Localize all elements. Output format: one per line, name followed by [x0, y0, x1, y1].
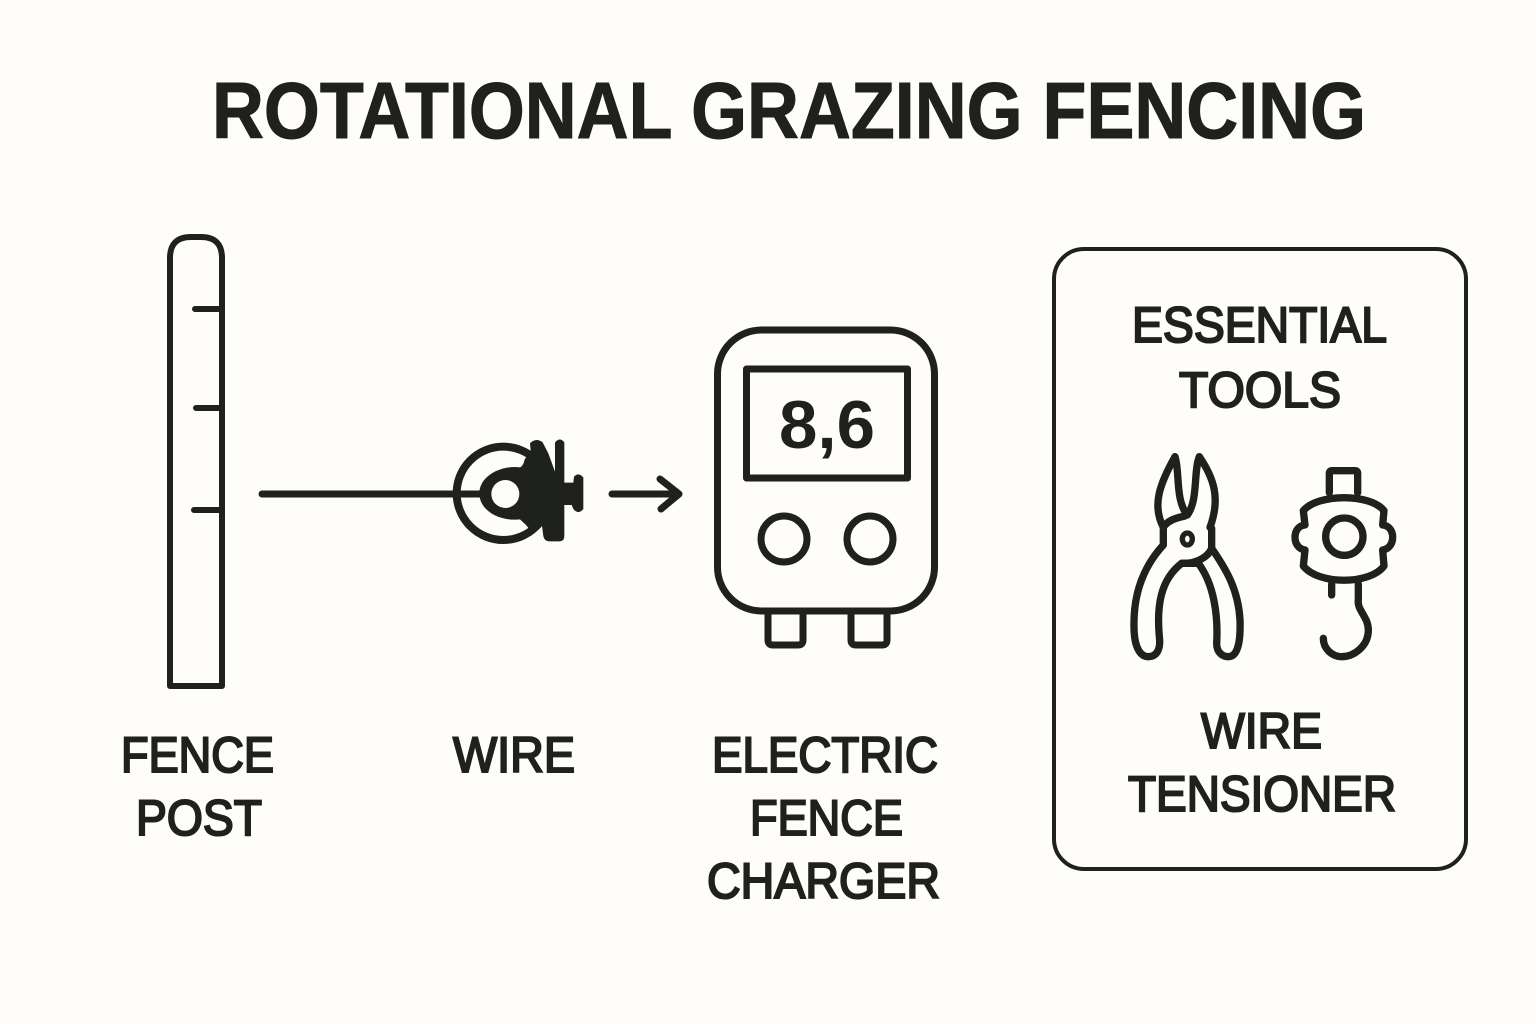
label: wire: WIRE	[453, 727, 575, 783]
arrow	[612, 479, 679, 509]
panel heading: TOOLS	[1179, 362, 1341, 418]
icon: fence post	[170, 237, 222, 686]
label: electric fence charger: CHARGER	[707, 853, 940, 909]
title: ROTATIONAL GRAZING FENCING	[212, 66, 1366, 155]
display reading: 8,6	[779, 387, 875, 463]
icon: pliers	[1134, 457, 1240, 657]
panel heading	[1132, 297, 1387, 418]
charger terminals	[768, 613, 887, 645]
panel frame	[1054, 249, 1466, 869]
label: wire tensioner	[1128, 703, 1396, 822]
charger display	[746, 369, 908, 478]
charger body	[718, 330, 934, 611]
icon: wire tensioner	[1295, 471, 1393, 657]
icon: electric fence charger	[718, 330, 934, 645]
charger knobs	[761, 516, 893, 562]
label: electric fence charger: FENCE	[750, 790, 903, 846]
label: fence post	[121, 727, 274, 846]
label: electric fence charger	[707, 727, 940, 909]
label: wire tensioner: TENSIONER	[1128, 766, 1396, 822]
panel: essential tools	[1054, 249, 1466, 869]
panel heading: ESSENTIAL	[1132, 297, 1387, 353]
icon: wire with insulator	[262, 439, 583, 541]
label: fence post: POST	[136, 790, 262, 846]
label: fence post: FENCE	[121, 727, 274, 783]
label: wire tensioner: WIRE	[1201, 703, 1322, 759]
label: electric fence charger: ELECTRIC	[712, 727, 938, 783]
